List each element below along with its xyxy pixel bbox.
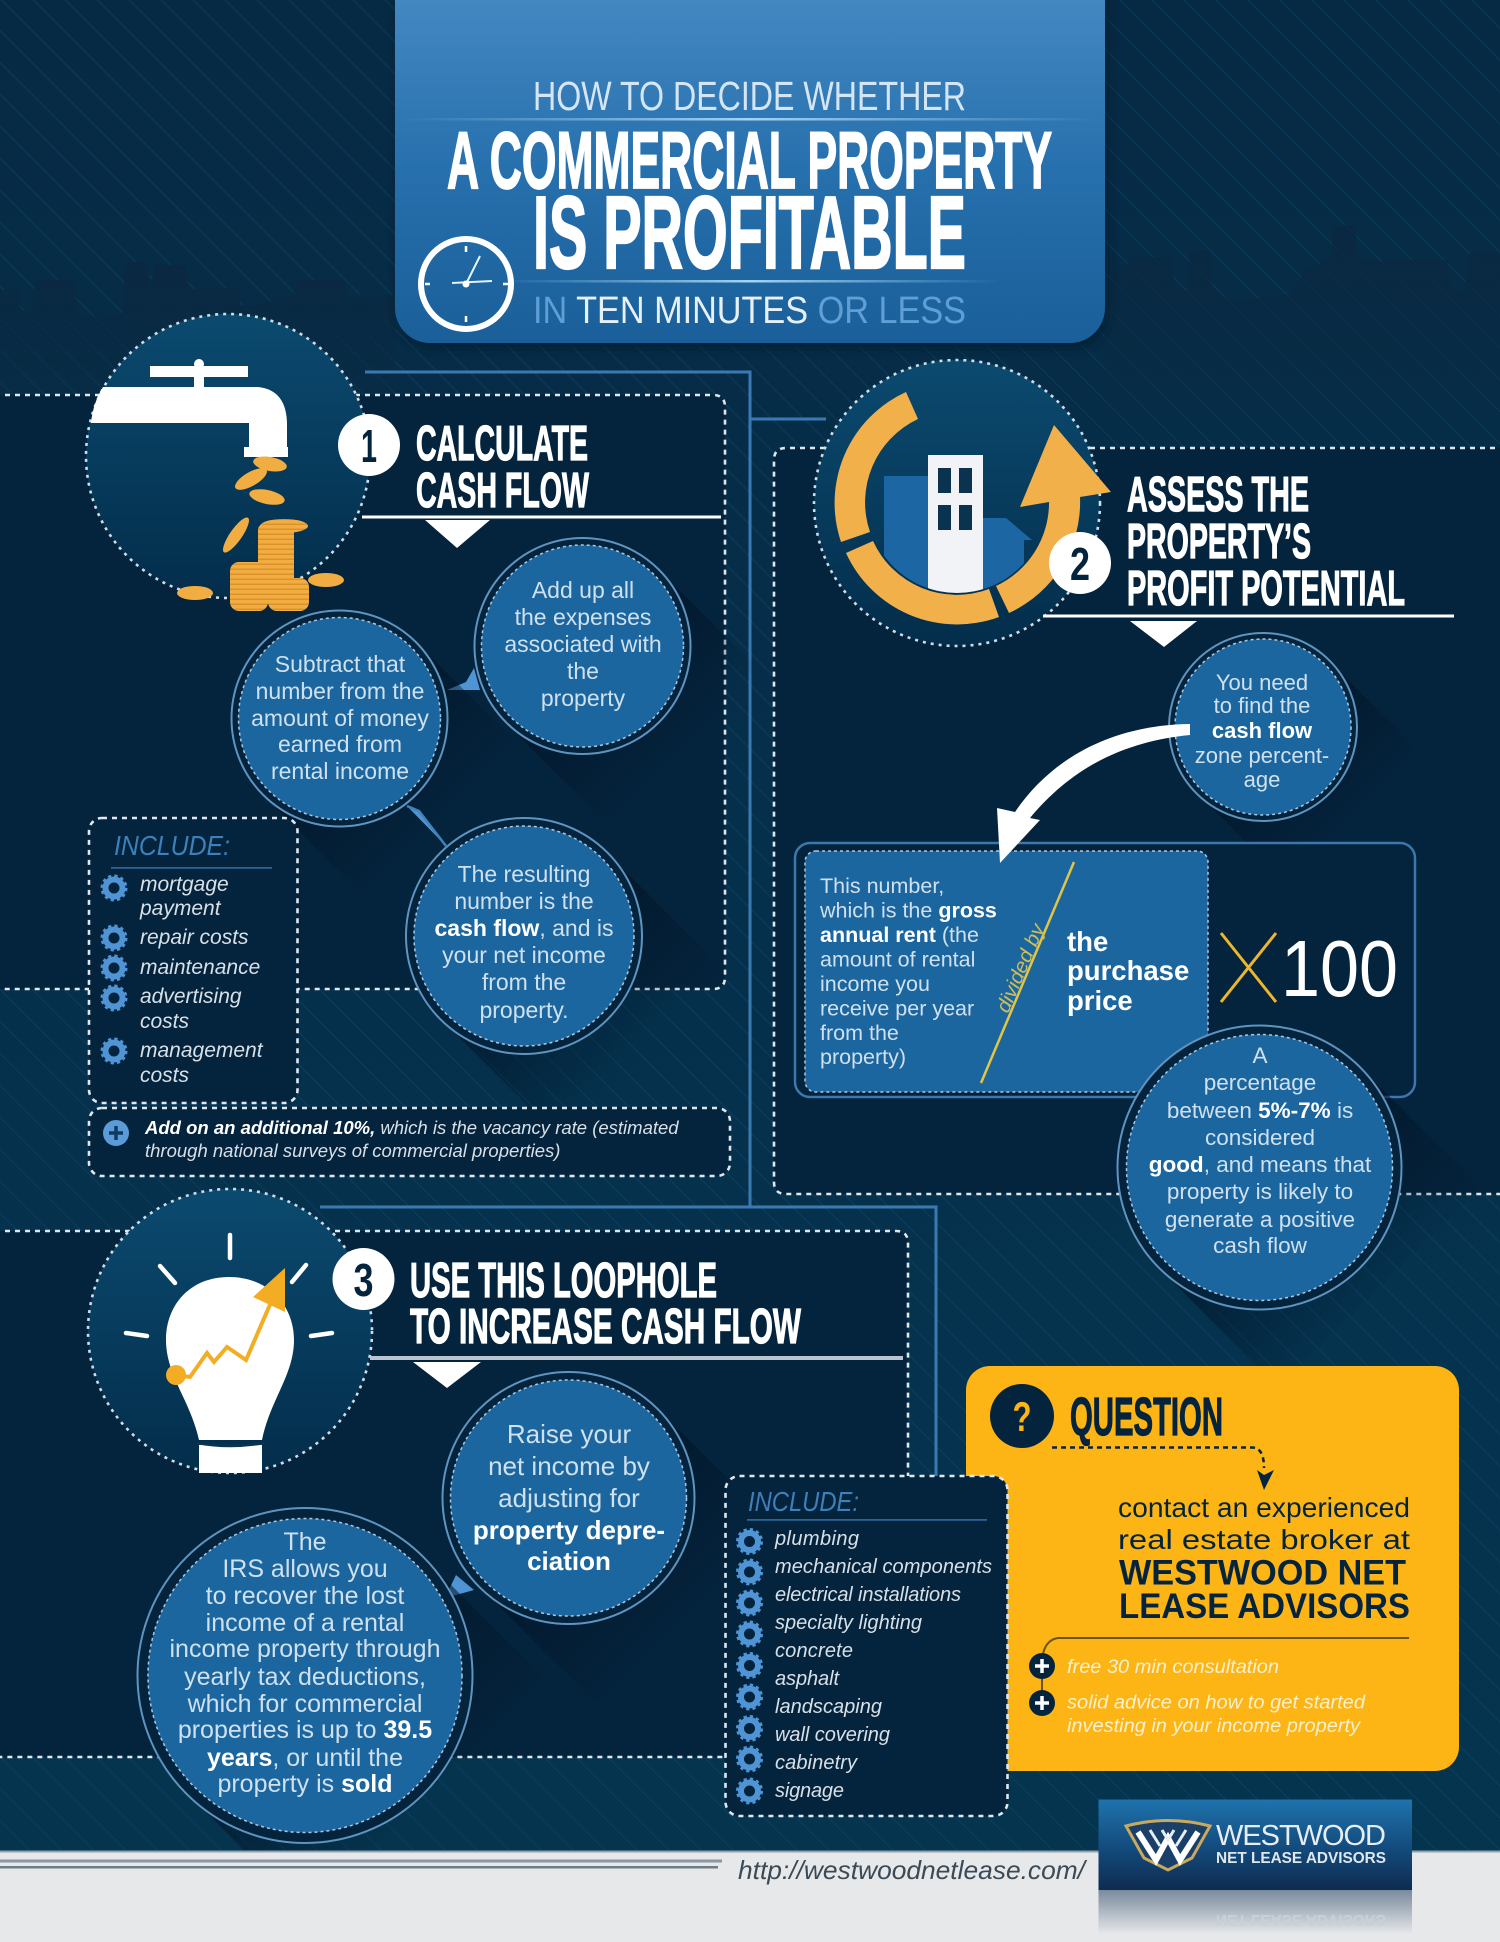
list items: signage	[775, 1780, 844, 1802]
heading: assess the property's profit potential: ASSESS THE	[1127, 468, 1309, 522]
formula numerator text: from the	[820, 1021, 899, 1045]
formula numerator text: property)	[820, 1045, 906, 1069]
panel: step 2 background	[774, 448, 1500, 1194]
badge: number 1	[338, 414, 400, 476]
panel: formula	[795, 843, 1415, 1097]
list items: management	[140, 1039, 264, 1062]
list items: plumbing	[774, 1528, 859, 1550]
bubble: subtract that number: Subtract that	[275, 651, 406, 677]
icon: question mark: ?	[1012, 1393, 1032, 1440]
panel: step 3 background	[0, 1231, 908, 1757]
heading: assess the property's profit potential	[1127, 468, 1405, 616]
list items: payment	[139, 897, 222, 920]
bubble: find cash flow zone: age	[1244, 767, 1280, 792]
bubble: subtract that number: amount of money	[251, 705, 429, 731]
icon: question mark	[990, 1384, 1054, 1448]
benefit text	[1067, 1656, 1366, 1737]
list items: concrete	[775, 1640, 853, 1662]
panel: include list 2	[726, 1476, 1008, 1816]
bubble: property depreciation: adjusting for	[498, 1483, 640, 1513]
logo wordmark	[1216, 1820, 1386, 1867]
bubble: good percentage	[1118, 1026, 1480, 1388]
heading: calculate cash flow	[416, 417, 589, 518]
benefit text: free 30 min consultation	[1067, 1656, 1279, 1678]
city skyline silhouette	[0, 225, 1500, 430]
contact text: WESTWOOD NET	[1119, 1554, 1406, 1592]
logo: westwood net lease advisors	[1098, 1800, 1412, 1934]
connector: bubble to IRS bubble	[445, 1575, 474, 1598]
bubble: property depreciation: net income by	[488, 1451, 650, 1481]
icon: gears	[738, 1530, 762, 1803]
panel: include list 2: INCLUDE:	[748, 1486, 859, 1517]
list items: mechanical components	[775, 1556, 992, 1578]
icon: gears	[102, 876, 126, 1063]
dashed arrow	[1052, 1448, 1274, 1490]
badge: number 1: 1	[361, 420, 377, 472]
logo: westwood net lease advisors: NET LEASE ADVISORS	[1216, 1911, 1386, 1928]
badge: number 3	[332, 1248, 394, 1310]
icon: plus	[1029, 1653, 1055, 1679]
arrow: heading pointer	[1130, 621, 1197, 647]
list items: landscaping	[775, 1696, 882, 1718]
list items: advertising	[140, 985, 242, 1008]
title line: in ten minutes or less: IN TEN MINUTES OR LESS	[533, 290, 966, 332]
bubble: add up all expenses: Add up all	[532, 577, 634, 603]
formula numerator text: receive per year	[820, 996, 974, 1020]
heading: assess the property's profit potential: PROPERTY’S	[1127, 515, 1311, 569]
bubble: good percentage: considered	[1205, 1125, 1315, 1150]
icon: plus	[1029, 1690, 1055, 1716]
bubble: IRS tax deductions: years, or until the	[207, 1744, 403, 1772]
step 1 section	[86, 314, 759, 1176]
heading: calculate cash flow: CASH FLOW	[416, 464, 589, 518]
badge: number 2: 2	[1070, 538, 1090, 590]
bubble: property depreciation	[442, 1372, 778, 1707]
heading: use this loophole	[410, 1254, 801, 1354]
list items: maintenance	[140, 956, 260, 979]
bubble: good percentage: cash flow	[1213, 1233, 1308, 1258]
bubble: good percentage: property is likely to	[1167, 1179, 1353, 1204]
number 100: 100	[1281, 924, 1398, 1013]
bubble: subtract that number: number from the	[256, 678, 424, 704]
bubble: IRS tax deductions: yearly tax deductions,	[184, 1663, 426, 1691]
bubble: resulting cash flow: your net income	[442, 942, 606, 968]
list items: wall covering	[775, 1724, 890, 1746]
formula denominator text: price	[1067, 985, 1133, 1016]
icon: clock	[421, 239, 511, 329]
formula numerator text: This number,	[820, 874, 944, 898]
bubble: resulting cash flow: property.	[479, 997, 569, 1023]
callout: add vacancy rate: through national surveys of commercial properties)	[145, 1140, 560, 1161]
bubble: add up all expenses: the expenses	[515, 604, 651, 630]
heading: calculate cash flow: CALCULATE	[416, 417, 588, 471]
list items	[139, 873, 264, 1087]
formula denominator text: purchase	[1067, 955, 1189, 986]
list items: cabinetry	[775, 1752, 858, 1774]
heading: use this loophole: TO INCREASE CASH FLOW	[410, 1300, 801, 1354]
heading: question: QUESTION	[1070, 1387, 1223, 1447]
list items	[774, 1528, 992, 1802]
bubble: find cash flow zone	[1169, 633, 1419, 883]
icon: building with growth arrow	[814, 360, 1111, 646]
bubble: find cash flow zone: You need	[1216, 670, 1308, 695]
bubble: IRS tax deductions: which for commercial	[187, 1690, 422, 1718]
panel: include list 1	[89, 818, 298, 1103]
logo wordmark: WESTWOOD	[1216, 1820, 1386, 1852]
bubble: property depreciation: property depre-	[473, 1515, 665, 1545]
icon: lightbulb with chart	[88, 1189, 372, 1473]
contact text: real estate broker at	[1118, 1524, 1410, 1555]
bubble: find cash flow zone: to find the	[1214, 693, 1310, 718]
connector: bubble to bubble	[447, 668, 480, 690]
bubble: IRS tax deductions: to recover the lost	[206, 1582, 404, 1610]
website url: http://westwoodnetlease.com/	[738, 1855, 1088, 1885]
bubble: good percentage: between 5%-7% is	[1167, 1098, 1353, 1123]
formula numerator text: income you	[820, 972, 930, 996]
bubble: resulting cash flow: cash flow, and is	[435, 915, 613, 941]
badge: number 3: 3	[354, 1254, 374, 1306]
arrow: heading pointer	[425, 520, 490, 548]
bubble: good percentage: percentage	[1204, 1070, 1316, 1095]
title line: is profitable: IS PROFITABLE	[533, 175, 966, 290]
bubble: IRS tax deductions: The	[283, 1528, 327, 1556]
panel: include list 1: INCLUDE:	[114, 830, 230, 861]
icon: faucet pouring coins	[86, 314, 370, 611]
badge: number 2	[1049, 532, 1111, 594]
logo wordmark: NET LEASE ADVISORS	[1216, 1850, 1386, 1867]
list items: costs	[140, 1064, 190, 1087]
bubble: subtract that number: earned from	[278, 731, 402, 757]
panel: step 1 background	[0, 395, 725, 989]
bubble: good percentage: A	[1252, 1043, 1268, 1068]
connector: bubble to result	[407, 806, 446, 846]
bubble: subtract that number: rental income	[271, 758, 409, 784]
bubble: good percentage: generate a positive	[1165, 1207, 1355, 1232]
bubble: IRS tax deductions: properties is up to 39.5	[178, 1716, 432, 1744]
bubble: IRS tax deductions: income of a rental	[206, 1609, 404, 1637]
callout: add vacancy rate: Add on an additional 10%, which is the vacancy rate (estimated	[144, 1117, 679, 1138]
list items: repair costs	[140, 926, 249, 949]
bubble: IRS tax deductions: property is sold	[217, 1770, 393, 1798]
list items: asphalt	[775, 1668, 840, 1690]
connector lines between steps	[320, 372, 936, 1476]
bubble: find cash flow zone: cash flow	[1212, 718, 1313, 743]
panel: question box	[966, 1366, 1459, 1771]
title banner	[395, 0, 1108, 349]
bubble: resulting cash flow	[406, 818, 727, 1139]
multiply sign	[1221, 933, 1276, 1002]
callout: add vacancy rate	[89, 1108, 730, 1176]
bubble: good percentage: good, and means that	[1149, 1152, 1371, 1177]
formula denominator text: the	[1067, 926, 1108, 957]
bubble: find cash flow zone: zone percent-	[1195, 743, 1329, 768]
bubble: IRS tax deductions: IRS allows you	[222, 1555, 388, 1583]
bubble: resulting cash flow: number is the	[454, 888, 594, 914]
bubble: property depreciation: Raise your	[507, 1419, 631, 1449]
bubble: subtract that number	[232, 610, 516, 895]
formula numerator text: annual rent (the	[820, 923, 979, 947]
contact text	[1118, 1492, 1410, 1626]
divided by label: divided by	[992, 920, 1050, 1016]
formula numerator text: which is the gross	[820, 898, 997, 922]
bubble: IRS tax deductions: income property through	[170, 1635, 440, 1663]
bubble: add up all expenses: associated with	[504, 631, 662, 657]
list items: electrical installations	[775, 1584, 961, 1606]
benefit text: solid advice on how to get started	[1067, 1692, 1366, 1714]
divider slash	[981, 862, 1074, 1083]
bubble: add up all expenses: property	[541, 685, 626, 711]
step 3 section	[88, 1189, 903, 1913]
title line: how to decide whether: HOW TO DECIDE WHETHER	[533, 73, 966, 119]
arrow: curved pointer to formula	[997, 724, 1190, 863]
formula numerator text: amount of rental	[820, 948, 975, 972]
bubble: IRS tax deductions	[138, 1508, 543, 1913]
list items: costs	[140, 1010, 190, 1033]
arrow: heading pointer	[413, 1362, 481, 1388]
heading: use this loophole: USE THIS LOOPHOLE	[410, 1254, 717, 1308]
contact text: contact an experienced	[1118, 1492, 1410, 1523]
logo mark	[1126, 1820, 1210, 1870]
bubble: resulting cash flow: from the	[482, 969, 566, 995]
benefit text: investing in your income property	[1067, 1715, 1361, 1737]
bubble: add up all expenses	[474, 538, 759, 823]
list items: mortgage	[140, 873, 229, 896]
footer band	[0, 1850, 1500, 1942]
bubble: property depreciation: ciation	[527, 1546, 611, 1576]
bubble: add up all expenses: the	[567, 658, 599, 684]
step 2 section	[795, 360, 1480, 1388]
contact text: LEASE ADVISORS	[1119, 1587, 1410, 1626]
list items: specialty lighting	[775, 1612, 922, 1634]
bubble: resulting cash flow: The resulting	[458, 861, 590, 887]
